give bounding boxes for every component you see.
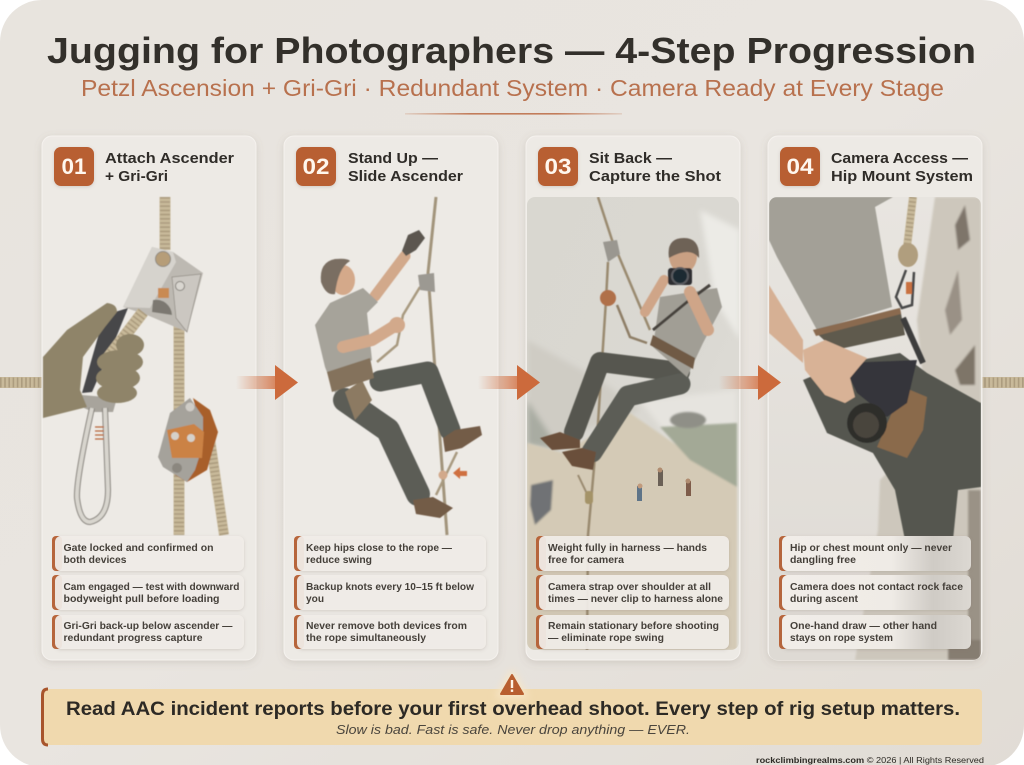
arrow: step 2 to 3 (478, 365, 540, 400)
step 4 heading (831, 151, 973, 185)
warning subline: Slow is bad. Fast is safe. Never drop anything — EVER. (336, 722, 690, 737)
head (321, 259, 355, 295)
step 2 heading: Stand Up — (348, 151, 439, 167)
step 2 tips: Never remove both devices from (306, 620, 467, 632)
shoes (443, 426, 482, 452)
arrow: step 1 to 2 (236, 365, 298, 400)
people below (637, 468, 691, 501)
climber and ropes (540, 197, 722, 650)
title: Jugging for Photographers — 4-Step Progression (47, 30, 976, 71)
hand (803, 340, 867, 403)
raised arm (375, 256, 405, 296)
step 3 badge: 03 (544, 154, 572, 179)
step 1 tips (52, 536, 244, 649)
mountain backdrop (527, 210, 740, 470)
legs (380, 372, 450, 430)
step 3 tips: Remain stationary before shooting (548, 620, 719, 632)
warning headline: Read AAC incident reports before your first overhead shoot. Every step of rig setup matters. (66, 698, 960, 720)
step 1 badge: 01 (62, 154, 86, 179)
icon: warning triangle (495, 669, 529, 698)
Gri-Gri (158, 398, 218, 482)
step 3 tips (536, 536, 729, 649)
step 2 tips: the rope simultaneously (306, 632, 426, 644)
step 1 tips: both devices (64, 554, 127, 566)
panel: step 2 (284, 136, 498, 660)
small arrow (453, 467, 467, 479)
harness belt (813, 308, 905, 350)
subtitle: Petzl Ascension + Gri-Gri · Redundant System · Camera Ready at Every Stage (81, 75, 944, 101)
step 4 badge: 04 (786, 154, 814, 179)
step 2 badge: 02 (302, 154, 330, 179)
step 1 heading (105, 151, 234, 185)
legs (574, 362, 680, 432)
torso (653, 288, 722, 377)
step 2 heading (348, 151, 463, 185)
step 1 tips: Cam engaged — test with downward (64, 581, 240, 593)
handle and sling (77, 308, 128, 522)
lower arm (343, 327, 393, 347)
step 1 heading: + Gri-Gri (105, 169, 168, 185)
step 3 tips: free for camera (548, 554, 624, 566)
step 3 tips: times — never clip to harness alone (548, 593, 723, 605)
shirt (769, 197, 893, 330)
step 2 tips (294, 536, 486, 649)
step 1 badge (54, 147, 94, 186)
panel: step 1 (42, 136, 256, 660)
step 4 heading: Hip Mount System (831, 169, 973, 185)
rock face (855, 197, 981, 660)
gloved hand (43, 303, 144, 418)
step 3 tips: Camera strap over shoulder at all (548, 581, 711, 593)
head and camera (668, 238, 699, 285)
panel: step 3 (526, 136, 740, 660)
harness (327, 358, 374, 392)
step 4 tips: during ascent (790, 593, 858, 605)
step 4 tips: One-hand draw — other hand (790, 620, 937, 632)
illustration: camera on hip mount (769, 197, 981, 660)
step 4 heading: Camera Access — (831, 151, 969, 167)
step 4 badge (780, 147, 820, 186)
ascender (123, 247, 203, 332)
camera (843, 360, 917, 443)
warning banner (42, 669, 982, 745)
step 2 tips: reduce swing (306, 554, 372, 566)
step 4 tips: dangling free (790, 554, 856, 566)
footer credit: rockclimbingrealms.com © 2026 | All Rights Reserved (756, 755, 984, 765)
step 1 tips: redundant progress capture (64, 632, 203, 644)
step 2 tips: Backup knots every 10–15 ft below (306, 581, 475, 593)
step 4 tips: Camera does not contact rock face (790, 581, 963, 593)
step 1 tips: Gri-Gri back-up below ascender — (64, 620, 233, 632)
step 2 heading: Slide Ascender (348, 169, 463, 185)
step 3 badge (538, 147, 578, 186)
step 2 badge (296, 147, 336, 186)
horizontal rope left (0, 377, 44, 388)
arm (769, 285, 803, 363)
rope and carabiner (907, 197, 913, 247)
panel: step 4 (768, 136, 982, 660)
step 2 tips: Keep hips close to the rope — (306, 542, 452, 554)
arms (645, 280, 664, 312)
step 1 tips: bodyweight pull before loading (64, 593, 220, 605)
step 3 tips: — eliminate rope swing (548, 632, 664, 644)
step 3 heading (589, 151, 721, 185)
title divider (405, 113, 622, 115)
step 4 tips: stays on rope system (790, 632, 893, 644)
step 3 heading: Capture the Shot (589, 169, 721, 185)
step 4 tips: Hip or chest mount only — never (790, 542, 952, 554)
illustration: climber photographing from harness (527, 197, 740, 650)
horizontal rope right (980, 377, 1024, 388)
step 2 tips: you (306, 593, 324, 605)
ground (527, 412, 737, 650)
illustration: climber standing in etrier (315, 197, 482, 535)
holster (877, 387, 927, 458)
step 4 tips (779, 536, 971, 649)
climber detail (769, 197, 981, 540)
step 1 tips: Gate locked and confirmed on (64, 542, 214, 554)
step 3 heading: Sit Back — (589, 151, 673, 167)
illustration: ascender, hand and Gri-Gri (43, 197, 224, 535)
arrow: step 3 to 4 (719, 365, 781, 400)
step 1 heading: Attach Ascender (105, 151, 234, 167)
step 3 tips: Weight fully in harness — hands (548, 542, 707, 554)
torso (315, 288, 378, 393)
pants (803, 353, 981, 540)
